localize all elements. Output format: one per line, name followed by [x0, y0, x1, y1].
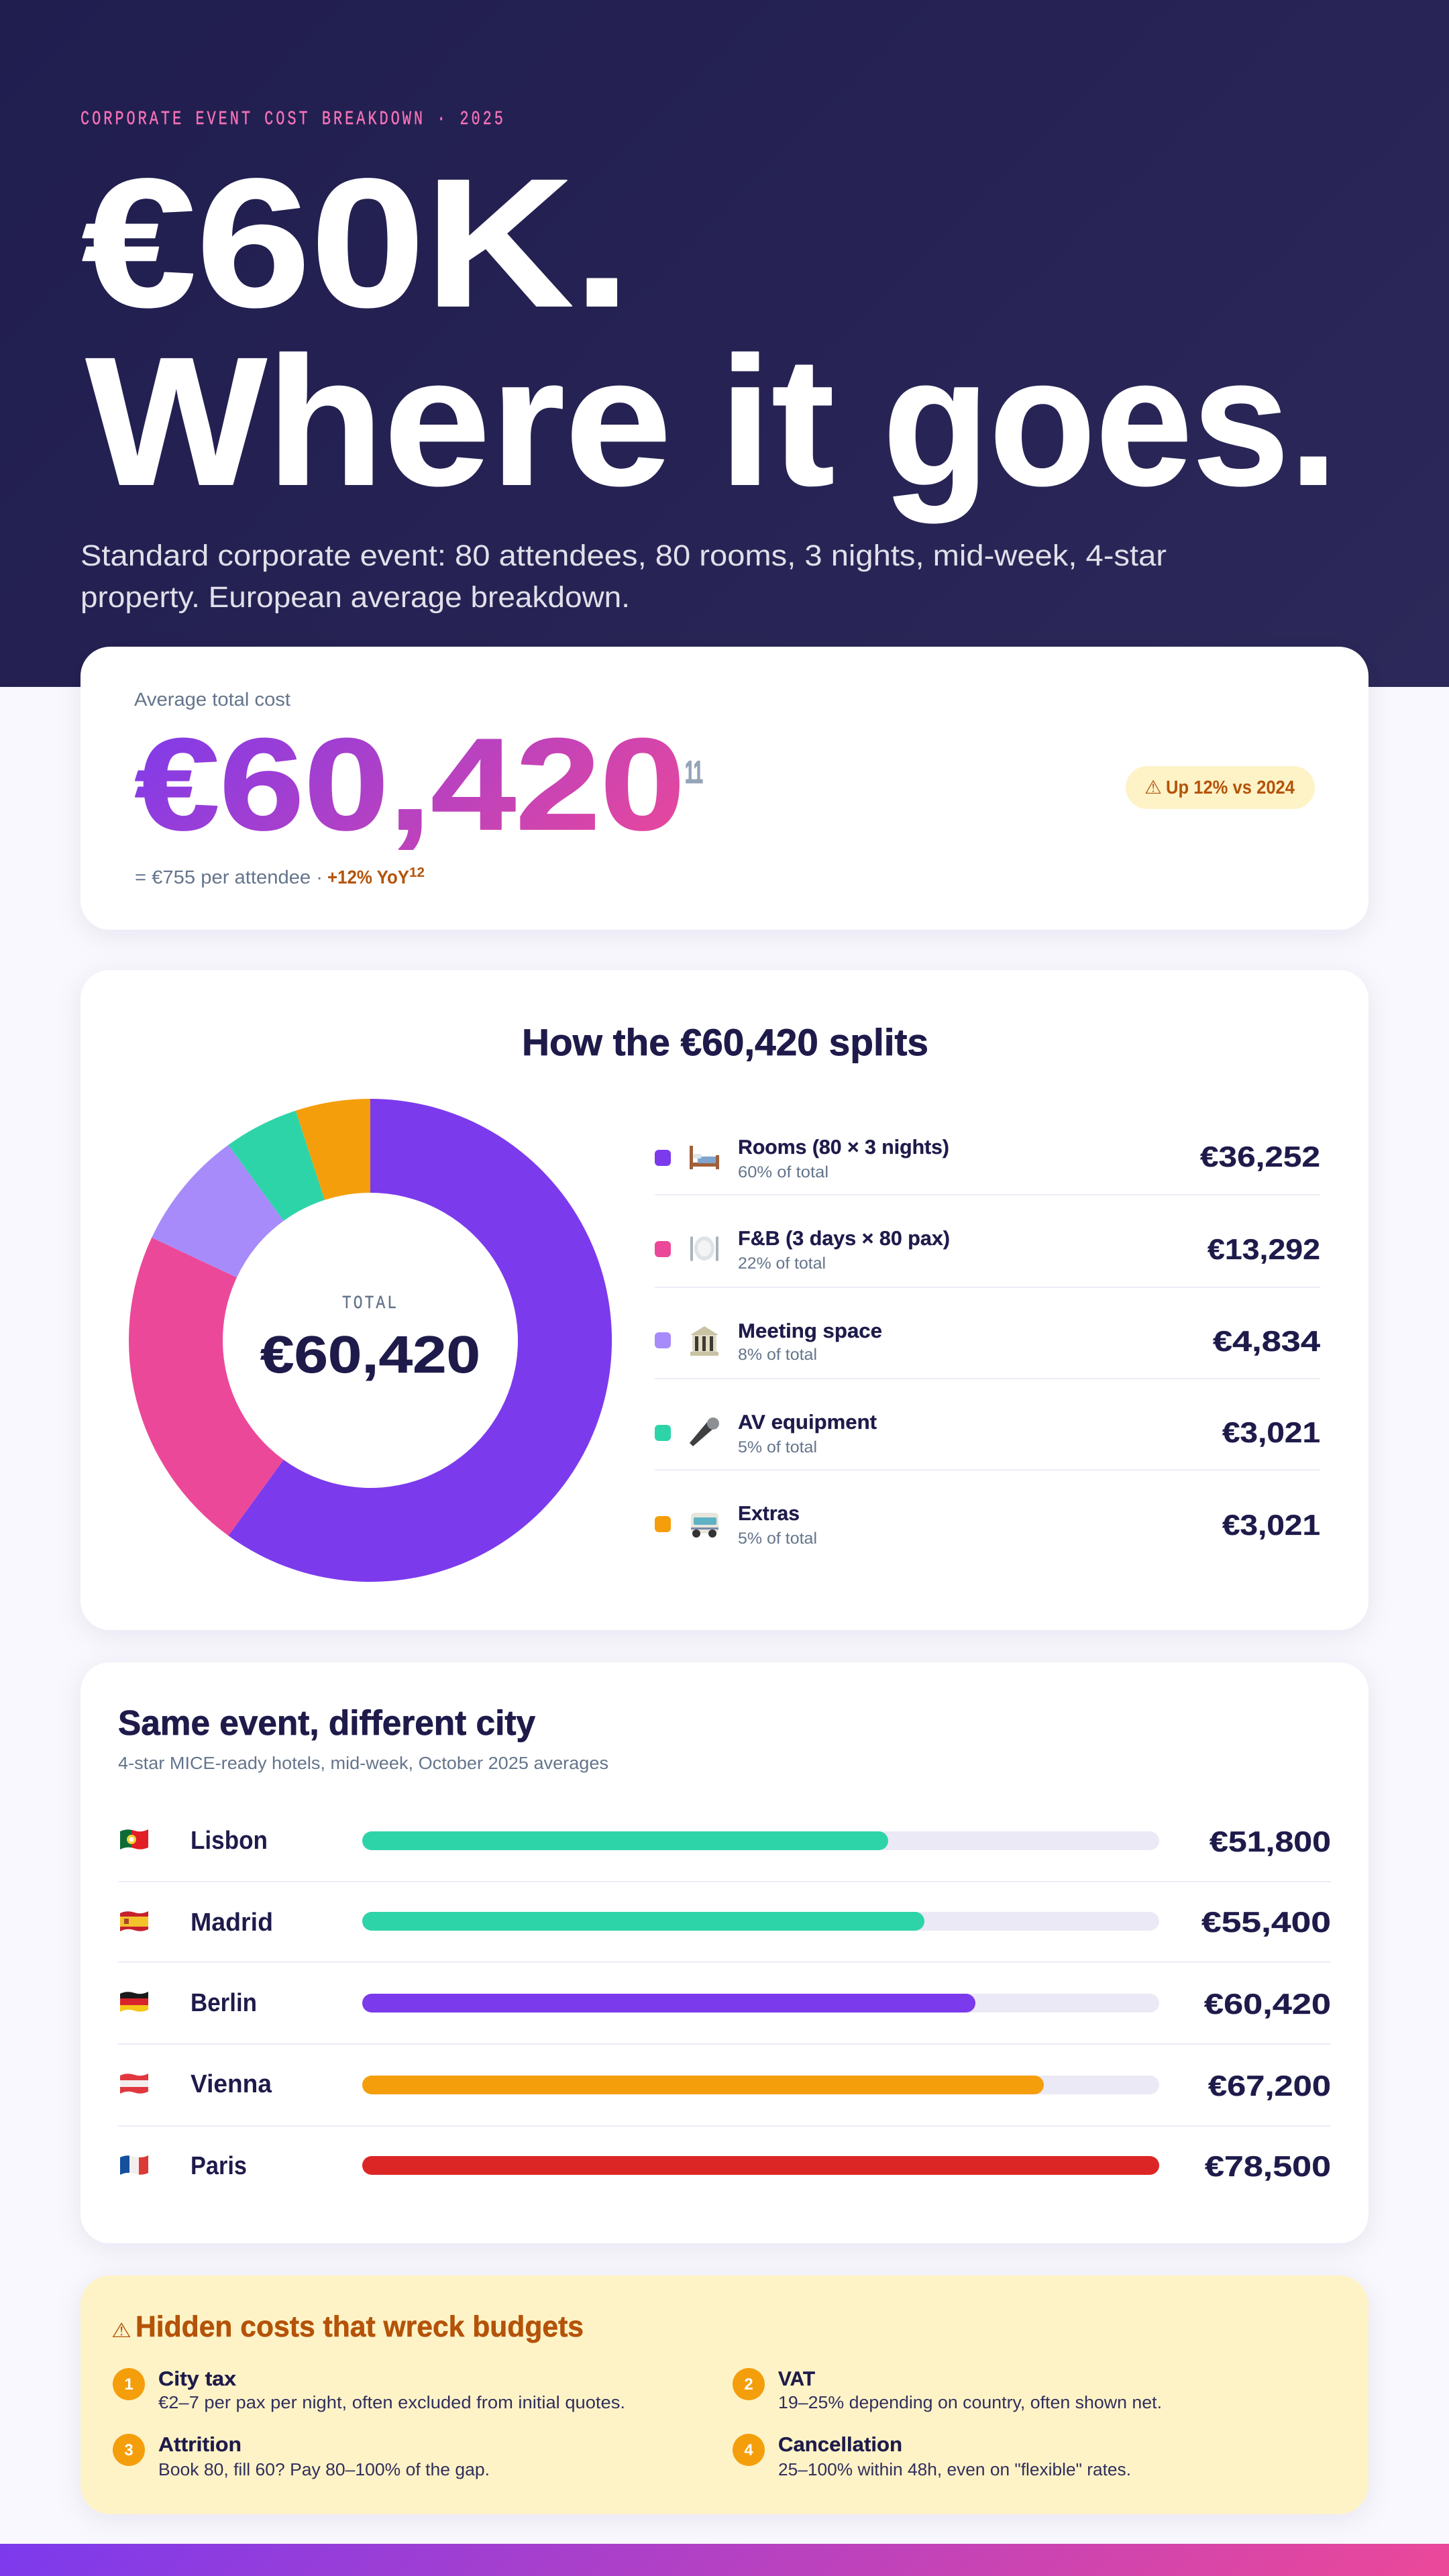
item 2: VAT [733, 2368, 1162, 2412]
city row: Berlin [120, 1992, 1330, 2019]
legend row: rooms: 60% of total [738, 1163, 828, 1181]
city row: Madrid [120, 1911, 1330, 1937]
heading: how the total splits: How the €60,420 splits [522, 1021, 928, 1063]
item 2: VAT: 2 [744, 2375, 753, 2394]
legend row: meeting space: Meeting space [738, 1320, 882, 1342]
icon: Germany flag [120, 1992, 148, 2012]
subtitle [80, 539, 1167, 614]
legend row: AV equipment: AV equipment [738, 1411, 877, 1434]
city row: Vienna: €67,200 [1208, 2070, 1331, 2102]
label: average total cost: Average total cost [134, 689, 290, 710]
legend row: food and beverage: 22% of total [738, 1254, 826, 1273]
item 1: city tax: €2–7 per pax per night, often excluded from initial quotes. [158, 2392, 625, 2412]
legend row: meeting space [655, 1320, 1320, 1364]
pill: up 12 percent: Up 12% vs 2024 [1166, 777, 1295, 798]
heading: hidden costs: Hidden costs that wreck budgets [136, 2310, 584, 2343]
city row: Lisbon [120, 1829, 1330, 1856]
city row: Paris: €78,500 [1205, 2151, 1331, 2183]
legend row: food and beverage [655, 1228, 1320, 1273]
title: €60K. [82, 141, 631, 345]
city row: Berlin: Berlin [191, 1989, 257, 2017]
city row: Madrid: €55,400 [1201, 1907, 1331, 1939]
footnote 11: 11 [685, 754, 703, 790]
legend row: meeting space: 8% of total [738, 1346, 817, 1364]
item 3: attrition [113, 2434, 490, 2479]
title: goes. [883, 319, 1338, 525]
icon: bed [690, 1146, 719, 1169]
item 2: VAT: VAT [778, 2368, 815, 2390]
legend row: extras: €3,021 [1222, 1509, 1320, 1542]
title: Where [86, 319, 672, 523]
icon: classical building [690, 1326, 718, 1356]
header band [0, 0, 1449, 687]
legend row: AV equipment [655, 1411, 1320, 1456]
icon: van [691, 1513, 718, 1538]
item 1: city tax [113, 2368, 625, 2412]
icon: plate [690, 1236, 718, 1261]
item 4: cancellation: 4 [744, 2441, 753, 2459]
panel: hidden costs [80, 2275, 1368, 2514]
title [82, 141, 1338, 525]
item 3: attrition: Attrition [158, 2434, 241, 2456]
icon: microphone [690, 1417, 719, 1446]
legend row: AV equipment: 5% of total [738, 1438, 817, 1456]
item 4: cancellation: Cancellation [778, 2434, 902, 2456]
legend row: food and beverage: F&B (3 days × 80 pax) [738, 1228, 950, 1250]
city row: Vienna [120, 2074, 1330, 2100]
item 3: attrition: 3 [124, 2441, 133, 2459]
item 2: VAT: 19–25% depending on country, often shown net. [778, 2392, 1162, 2412]
city row: Berlin: €60,420 [1204, 1988, 1331, 2021]
legend row: AV equipment: €3,021 [1222, 1417, 1320, 1449]
footnote 12: 12 [409, 865, 425, 880]
legend row: extras: 5% of total [738, 1529, 817, 1548]
pill: up 12 percent [1126, 766, 1315, 809]
icon: Spain flag [120, 1911, 148, 1931]
heading: same event, different city: Same event, different city [118, 1704, 535, 1743]
subtitle: property. European average breakdown. [80, 581, 630, 614]
item 1: city tax: 1 [124, 2375, 133, 2394]
item 3: attrition: Book 80, fill 60? Pay 80–100% of the gap. [158, 2459, 490, 2479]
footer gradient bar [0, 2544, 1449, 2576]
legend row: extras [655, 1503, 1320, 1548]
icon: France flag [120, 2155, 148, 2175]
legend row: rooms: €36,252 [1200, 1141, 1320, 1173]
subheading: 4-star MICE-ready hotels, mid-week, October 2025 averages [118, 1753, 608, 1773]
pill: up 12 percent: ⚠ [1144, 776, 1162, 798]
subtitle: Standard corporate event: 80 attendees, 80 rooms, 3 nights, mid-week, 4-star [80, 539, 1167, 572]
item 1: city tax: City tax [158, 2368, 236, 2390]
city row: Madrid: Madrid [191, 1909, 273, 1937]
city row: Lisbon: Lisbon [191, 1827, 268, 1855]
icon: warning: ⚠ [111, 2319, 131, 2343]
item 4: cancellation: 25–100% within 48h, even on "flexible" rates. [778, 2459, 1131, 2479]
panel: cost split [80, 970, 1368, 1630]
eyebrow label: CORPORATE EVENT COST BREAKDOWN · 2025 [80, 108, 503, 130]
donut chart [129, 1099, 612, 1582]
donut centre value: €60,420 [260, 1325, 480, 1384]
big number: €60,420 [135, 712, 685, 857]
year over year: +12% YoY [327, 867, 409, 888]
donut centre label: TOTAL [342, 1293, 396, 1313]
city row: Paris [120, 2155, 1330, 2181]
legend row: rooms [655, 1136, 1320, 1181]
city row: Lisbon: €51,800 [1210, 1826, 1331, 1858]
city row: Paris: Paris [191, 2152, 247, 2180]
icon: Austria flag [120, 2074, 148, 2094]
per attendee line: = €755 per attendee · [135, 867, 323, 888]
legend row: rooms: Rooms (80 × 3 nights) [738, 1136, 949, 1159]
legend row: extras: Extras [738, 1503, 800, 1525]
legend row: meeting space: €4,834 [1213, 1326, 1320, 1358]
panel: city comparison [80, 1662, 1368, 2243]
title: it [719, 319, 835, 523]
panel: average total cost [80, 647, 1368, 930]
legend row: food and beverage: €13,292 [1208, 1234, 1320, 1266]
item 4: cancellation [733, 2434, 1131, 2479]
icon: Portugal flag [120, 1829, 148, 1849]
city row: Vienna: Vienna [191, 2070, 272, 2098]
